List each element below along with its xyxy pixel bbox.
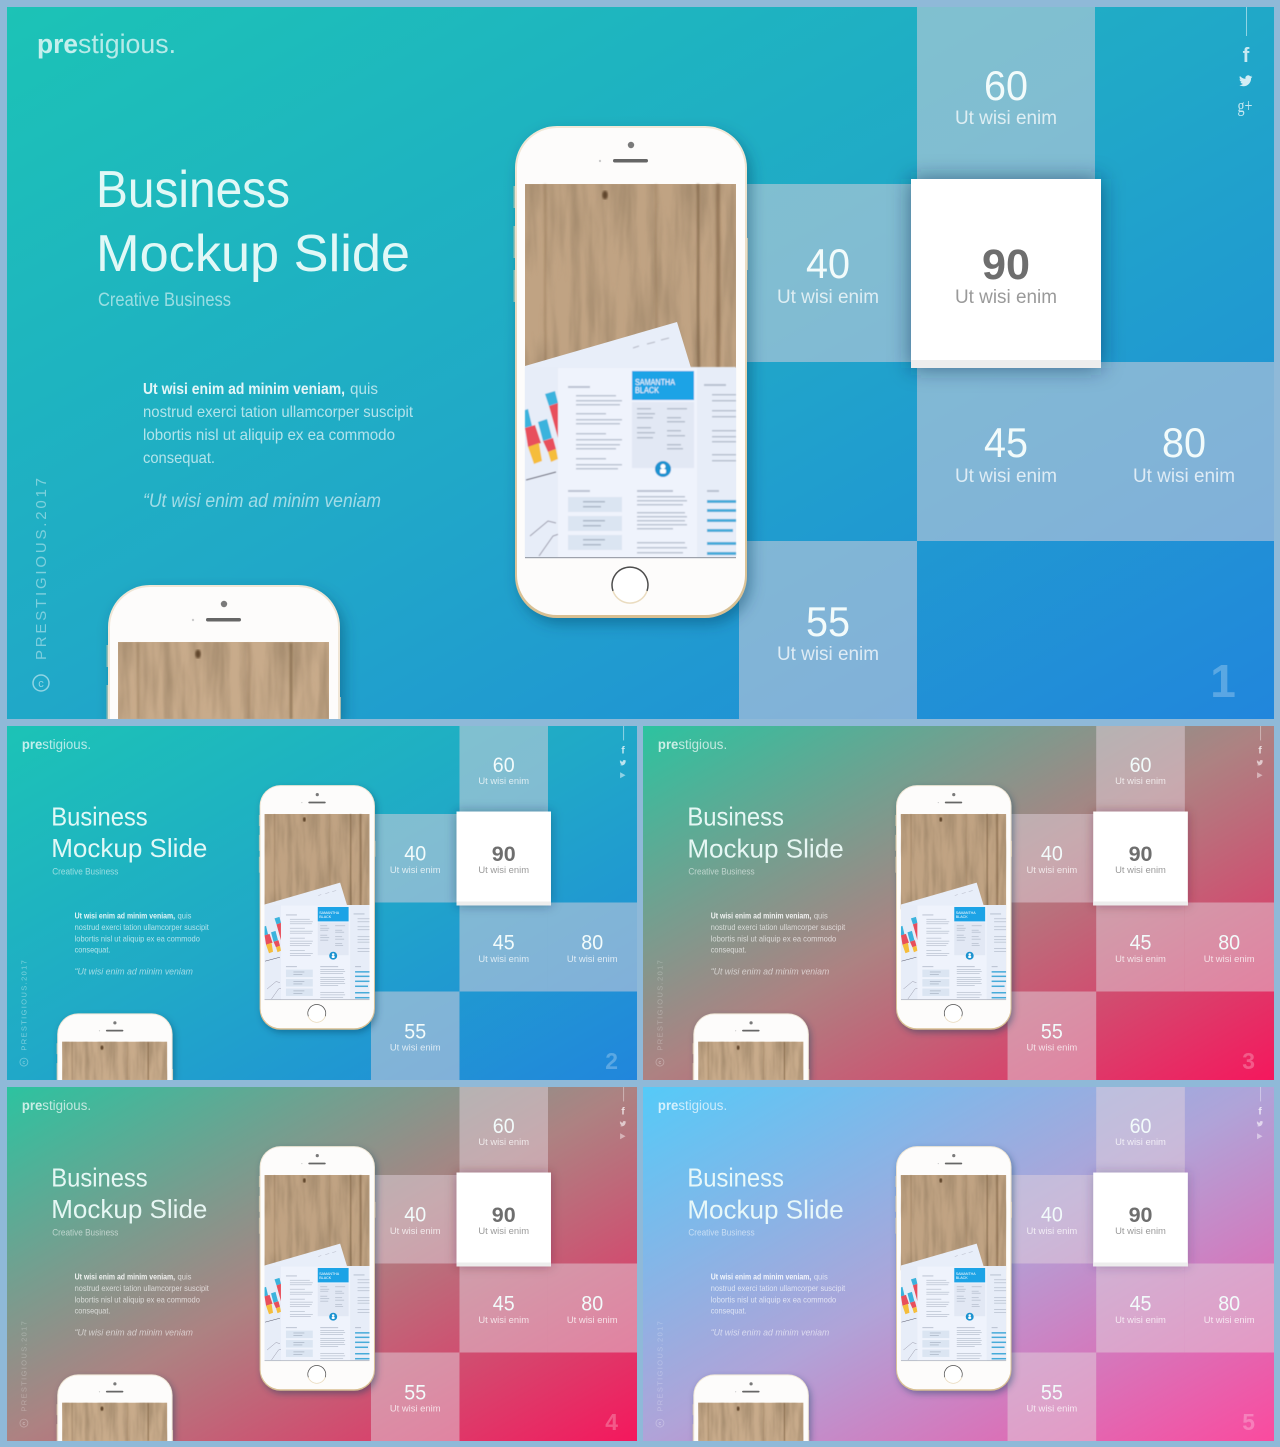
- highlighted tile 90: Ut wisi enim: [1115, 1226, 1166, 1237]
- title: [687, 1164, 844, 1224]
- tile 40: 40: [404, 1204, 426, 1227]
- title: Business: [687, 803, 784, 831]
- body text: Ut wisi enim ad minim veniam,: [75, 1272, 175, 1281]
- tile 60: 60: [493, 1115, 515, 1138]
- body text: Ut wisi enim ad minim veniam,: [711, 1272, 811, 1281]
- tile 40: Ut wisi enim: [390, 1226, 441, 1237]
- social icons: [1257, 726, 1263, 778]
- phone mockup cropped: [56, 1013, 175, 1083]
- highlighted tile 90: Ut wisi enim: [478, 865, 529, 876]
- tile 55: 55: [404, 1021, 426, 1044]
- tile 45: 45: [1130, 932, 1151, 955]
- logo: stigious.: [42, 1098, 91, 1113]
- tile 80: [548, 1264, 637, 1352]
- title: Mockup Slide: [51, 1196, 207, 1224]
- phone mockup large: [514, 126, 751, 624]
- tile 60: Ut wisi enim: [478, 1137, 529, 1148]
- phone mockup large: [895, 785, 1014, 1033]
- title: Business: [51, 1164, 148, 1192]
- body text: nostrud exerci tation ullamcorper suscipit: [711, 923, 846, 932]
- tile 80: Ut wisi enim: [1204, 1315, 1255, 1326]
- logo: stigious.: [678, 1098, 727, 1113]
- tile 60: [1096, 1087, 1185, 1175]
- tile 60: 60: [1130, 754, 1151, 777]
- title: Mockup Slide: [687, 835, 844, 863]
- quote: “Ut wisi enim ad minim veniam: [75, 967, 193, 978]
- body text: [711, 1272, 846, 1316]
- tile 60: Ut wisi enim: [478, 776, 529, 787]
- tile 60: [459, 726, 548, 814]
- logo: pre: [22, 1098, 42, 1113]
- tile 55: 55: [404, 1382, 426, 1405]
- highlighted tile 90: Ut wisi enim: [955, 287, 1057, 308]
- tile 40: [1008, 1175, 1096, 1264]
- highlighted tile 90: Ut wisi enim: [1115, 865, 1166, 876]
- title: [96, 161, 410, 283]
- phone mockup large: [259, 785, 377, 1033]
- phone mockup cropped: [106, 585, 344, 725]
- tile 40: 40: [1041, 1204, 1063, 1227]
- body text: [711, 911, 846, 955]
- vertical copyright: c: [659, 1060, 662, 1066]
- tile 60: 60: [493, 754, 515, 777]
- logo: pre: [658, 737, 678, 752]
- tile 40: Ut wisi enim: [1026, 1226, 1077, 1237]
- body text: quis: [350, 381, 378, 398]
- subtitle: Creative Business: [688, 1228, 755, 1239]
- tile 55: 55: [1041, 1382, 1063, 1405]
- subtitle: Creative Business: [688, 867, 755, 878]
- tile 45: Ut wisi enim: [1115, 954, 1166, 965]
- tile 60: [1096, 726, 1185, 814]
- logo: pre: [37, 29, 78, 59]
- social icons: [1257, 1087, 1263, 1139]
- tile 80: [548, 903, 637, 992]
- panel: thumbnail slide 3: [643, 726, 1274, 1080]
- subtitle: Creative Business: [98, 290, 231, 311]
- panel: thumbnail slide 2: [7, 726, 637, 1080]
- slide number: 4: [605, 1409, 618, 1435]
- social icons: g+: [1238, 96, 1252, 117]
- tile 55: [1008, 992, 1096, 1080]
- title: Mockup Slide: [687, 1196, 844, 1224]
- panel: thumbnail slide 4: [7, 1087, 637, 1441]
- highlighted tile 90: 90: [492, 842, 516, 866]
- tile 80: [1095, 362, 1274, 541]
- vertical copyright: PRESTIGIOUS.2017: [655, 960, 664, 1051]
- social icons: f: [1243, 45, 1250, 67]
- tile 45: 45: [1130, 1293, 1151, 1316]
- slide number: 5: [1242, 1409, 1255, 1435]
- tile 55: Ut wisi enim: [777, 644, 879, 665]
- tile 80: 80: [1218, 1293, 1240, 1316]
- body text: nostrud exerci tation ullamcorper suscipit: [711, 1284, 846, 1293]
- social icons: f: [1258, 1106, 1262, 1117]
- body text: nostrud exerci tation ullamcorper suscipit: [75, 1284, 210, 1293]
- body text: consequat.: [75, 946, 110, 955]
- tile 45: 45: [493, 932, 515, 955]
- tile 55: Ut wisi enim: [390, 1043, 441, 1054]
- tile 80: Ut wisi enim: [1133, 466, 1235, 487]
- phone mockup cropped: [693, 1374, 811, 1444]
- tile 55: [1008, 1352, 1096, 1441]
- title: [51, 803, 207, 863]
- vertical copyright: c: [38, 678, 44, 690]
- social icons: [620, 1087, 626, 1139]
- vertical copyright: c: [23, 1421, 26, 1427]
- tile 40: [739, 184, 917, 362]
- body text: Ut wisi enim ad minim veniam,: [75, 911, 175, 920]
- body text: lobortis nisl ut aliquip ex ea commodo: [711, 934, 837, 943]
- tile 45: [1096, 1264, 1185, 1352]
- tile 55: Ut wisi enim: [390, 1404, 441, 1415]
- tile 45: [917, 362, 1095, 541]
- tile 45: [1096, 903, 1185, 992]
- body text: lobortis nisl ut aliquip ex ea commodo: [143, 427, 395, 444]
- tile 55: 55: [1041, 1021, 1063, 1044]
- title: Business: [51, 803, 148, 831]
- tile 80: [1185, 1264, 1274, 1352]
- body text: nostrud exerci tation ullamcorper suscipit: [75, 923, 210, 932]
- phone mockup large: [259, 1146, 377, 1394]
- body text: lobortis nisl ut aliquip ex ea commodo: [75, 1295, 200, 1304]
- slide number: 1: [1210, 655, 1236, 707]
- highlighted tile 90: Ut wisi enim: [478, 1226, 529, 1237]
- body text: quis: [814, 1272, 828, 1281]
- highlighted tile 90: [1093, 812, 1188, 905]
- logo: [37, 29, 176, 59]
- tile 55: Ut wisi enim: [1026, 1043, 1077, 1054]
- body text: nostrud exerci tation ullamcorper suscipit: [143, 404, 414, 421]
- title: Business: [96, 161, 290, 219]
- body text: consequat.: [711, 946, 747, 955]
- tile 40: Ut wisi enim: [390, 865, 441, 876]
- tile 40: 40: [806, 240, 850, 287]
- tile 45: [459, 1264, 548, 1352]
- phone mockup cropped: [56, 1374, 175, 1444]
- vertical copyright: PRESTIGIOUS.2017: [19, 960, 28, 1051]
- logo: pre: [658, 1098, 678, 1113]
- tile 55: 55: [806, 598, 850, 645]
- logo: stigious.: [78, 29, 176, 59]
- title: [687, 803, 844, 863]
- highlighted tile 90: [1093, 1173, 1188, 1266]
- subtitle: Creative Business: [52, 867, 119, 878]
- tile 60: Ut wisi enim: [955, 108, 1057, 129]
- panel: main slide 1: [7, 7, 1274, 719]
- body text: consequat.: [75, 1307, 110, 1316]
- phone mockup cropped: [693, 1013, 811, 1083]
- subtitle: Creative Business: [52, 1228, 119, 1239]
- tile 80: 80: [581, 1293, 603, 1316]
- social icons: f: [621, 1106, 625, 1117]
- tile 40: [371, 814, 459, 903]
- tile 80: 80: [1162, 419, 1206, 466]
- highlighted tile 90: [911, 179, 1101, 368]
- body text: quis: [178, 911, 192, 920]
- tile 45: Ut wisi enim: [955, 466, 1057, 487]
- tile 40: Ut wisi enim: [777, 287, 879, 308]
- social icons: [1238, 7, 1252, 117]
- tile 80: 80: [581, 932, 603, 955]
- tile 60: 60: [984, 62, 1028, 109]
- social icons: [620, 726, 626, 778]
- vertical copyright: PRESTIGIOUS.2017: [655, 1321, 664, 1412]
- quote: “Ut wisi enim ad minim veniam: [711, 967, 829, 978]
- tile 80: [1185, 903, 1274, 992]
- tile 55: Ut wisi enim: [1026, 1404, 1077, 1415]
- tile 40: 40: [1041, 843, 1063, 866]
- highlighted tile 90: [457, 812, 551, 905]
- tile 60: Ut wisi enim: [1115, 776, 1166, 787]
- tile 80: Ut wisi enim: [1204, 954, 1255, 965]
- tile 55: [371, 992, 459, 1080]
- vertical copyright: PRESTIGIOUS.2017: [19, 1321, 28, 1412]
- quote: “Ut wisi enim ad minim veniam: [75, 1328, 193, 1339]
- phone mockup large: [895, 1146, 1014, 1394]
- tile 80: 80: [1218, 932, 1240, 955]
- title: [51, 1164, 207, 1224]
- body text: [75, 1272, 210, 1316]
- body text: Ut wisi enim ad minim veniam,: [143, 381, 345, 398]
- tile 45: 45: [984, 419, 1028, 466]
- vertical copyright: c: [23, 1060, 26, 1066]
- highlighted tile 90: [457, 1173, 551, 1266]
- slide number: 2: [605, 1048, 618, 1074]
- body text: consequat.: [711, 1307, 747, 1316]
- tile 80: Ut wisi enim: [567, 954, 618, 965]
- title: Mockup Slide: [96, 225, 410, 283]
- tile 40: [371, 1175, 459, 1264]
- title: Business: [687, 1164, 784, 1192]
- tile 55: [371, 1352, 459, 1441]
- tile 60: 60: [1130, 1115, 1151, 1138]
- vertical copyright: c: [659, 1421, 662, 1427]
- body text: lobortis nisl ut aliquip ex ea commodo: [75, 934, 200, 943]
- tile 40: 40: [404, 843, 426, 866]
- logo: stigious.: [678, 737, 727, 752]
- highlighted tile 90: 90: [1129, 842, 1153, 866]
- tile 80: Ut wisi enim: [567, 1315, 618, 1326]
- body text: [75, 911, 210, 955]
- social icons: f: [1258, 745, 1262, 756]
- title: Mockup Slide: [51, 835, 207, 863]
- body text: quis: [814, 911, 828, 920]
- tile 60: [917, 7, 1095, 184]
- panel: thumbnail slide 5: [643, 1087, 1274, 1441]
- tile 55: [739, 541, 917, 719]
- logo: pre: [22, 737, 42, 752]
- body text: quis: [178, 1272, 192, 1281]
- tile 60: Ut wisi enim: [1115, 1137, 1166, 1148]
- quote: “Ut wisi enim ad minim veniam: [143, 491, 381, 512]
- body text: [143, 381, 414, 467]
- tile 45: Ut wisi enim: [1115, 1315, 1166, 1326]
- quote: “Ut wisi enim ad minim veniam: [711, 1328, 829, 1339]
- body text: lobortis nisl ut aliquip ex ea commodo: [711, 1295, 837, 1304]
- tile 45: Ut wisi enim: [478, 1315, 529, 1326]
- highlighted tile 90: 90: [492, 1203, 516, 1227]
- logo: stigious.: [42, 737, 91, 752]
- tile 40: [1008, 814, 1096, 903]
- tile 45: [459, 903, 548, 992]
- tile 60: [459, 1087, 548, 1175]
- social icons: f: [621, 745, 625, 756]
- highlighted tile 90: 90: [1129, 1203, 1153, 1227]
- tile 40: Ut wisi enim: [1026, 865, 1077, 876]
- tile 45: Ut wisi enim: [478, 954, 529, 965]
- body text: consequat.: [143, 450, 215, 467]
- body text: Ut wisi enim ad minim veniam,: [711, 911, 811, 920]
- tile 45: 45: [493, 1293, 515, 1316]
- slide number: 3: [1242, 1048, 1255, 1074]
- highlighted tile 90: 90: [982, 241, 1030, 289]
- vertical copyright: PRESTIGIOUS.2017: [33, 478, 50, 660]
